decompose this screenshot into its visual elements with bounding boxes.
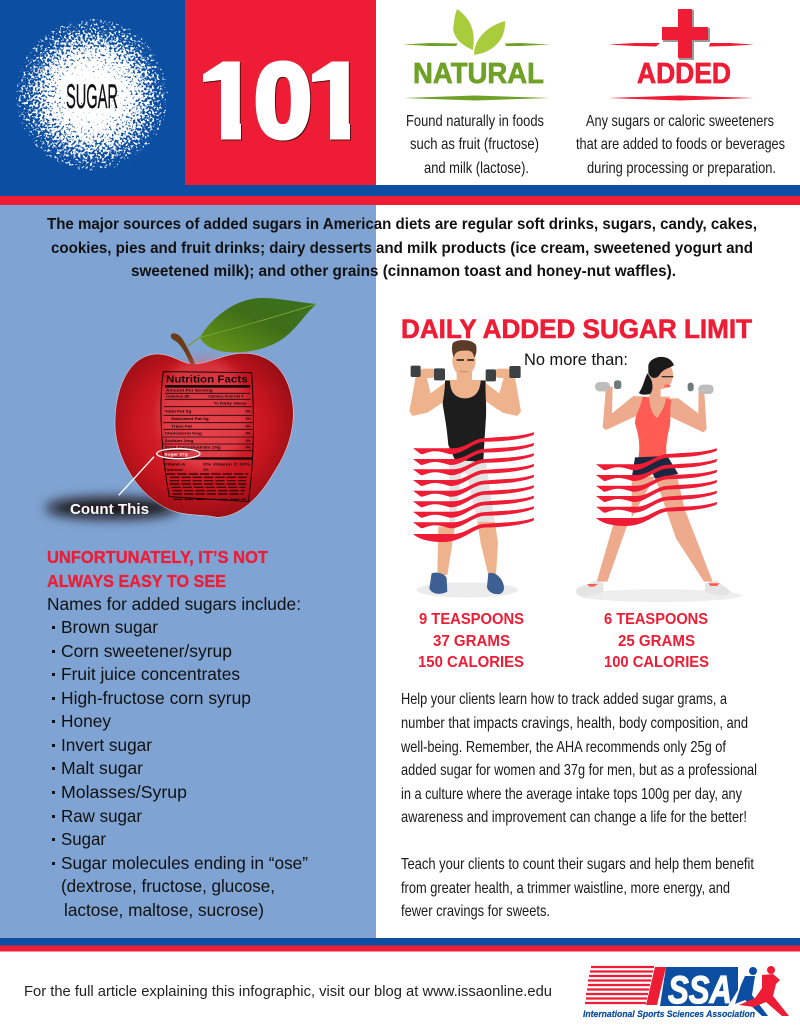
apple shadow [46, 498, 178, 518]
nutrition label: % Daily Value [214, 402, 247, 406]
panel: 101 [185, 0, 376, 185]
callout line [119, 457, 154, 495]
list: names for added sugars: Sugar molecules ending in “ose” [61, 853, 308, 873]
logo runners [735, 966, 789, 1016]
list: names for added sugars: Brown sugar [61, 617, 158, 637]
stats: women limits: 6 TEASPOONS [604, 611, 708, 628]
logo I [646, 967, 666, 1005]
text: natural description: Found naturally in foods [406, 113, 544, 130]
nutrition label: 0% [246, 424, 252, 428]
heading: not always easy to see [47, 547, 268, 591]
nutrition label: 0% [246, 439, 252, 443]
nutrition label: Total Carbohydrate 20g [165, 445, 221, 450]
nutrition label: 0% Vitamin C 10% [203, 462, 251, 466]
text: natural description: such as fruit (fructose) [410, 136, 539, 153]
nutrition label: Saturated Fat 0g [171, 416, 209, 421]
list: names for added sugars: Honey [61, 711, 111, 731]
top band [0, 185, 800, 205]
illustration: woman with dumbbells [576, 357, 742, 602]
nutrition label: Calories from Fat 4 [208, 395, 244, 399]
stats: women limits: 25 GRAMS [618, 633, 695, 650]
nutrition label: 6% [246, 446, 252, 450]
apple stem [171, 333, 195, 365]
text: added description [576, 113, 785, 177]
stats: men limits: 9 TEASPOONS [419, 611, 524, 628]
nutrition label: Sodium 2mg [165, 438, 194, 443]
nutrition label: Trans Fat [171, 423, 193, 428]
nutrition label: Vitamin A [165, 462, 186, 466]
callout label: Count This [70, 501, 149, 518]
bottom band [0, 938, 800, 952]
list: names for added sugars: Fruit juice concentrates [61, 664, 240, 684]
list: names for added sugars: Molasses/Syrup [61, 782, 187, 802]
sugar highlight ring: Sugar 37g [164, 451, 188, 456]
text: natural description: and milk (lactose). [424, 160, 529, 177]
nutrition label: Cholesterol 0mg [165, 431, 203, 436]
apple leaf [188, 298, 317, 352]
heading: 101 [203, 60, 351, 142]
logo tagline: International Sports Sciences Association [583, 1009, 755, 1020]
apple body [115, 353, 293, 517]
icon: sugar pile [16, 19, 168, 171]
highlights [158, 357, 248, 470]
sugar highlight ring [157, 449, 200, 459]
text: advice paragraphs: well-being. Remember, the AHA recommends only 25g of [400, 739, 726, 756]
text: advice paragraphs: from greater health, a trimmer waistline, more energy, and [401, 880, 730, 897]
text: major sources intro: The major sources of added sugars in American diets are regular soft drinks, sugars, candy, cakes, [47, 216, 757, 233]
panel: sugar header [0, 0, 185, 196]
icon: man spoons [413, 432, 534, 542]
icon: plus [608, 9, 754, 60]
heading: 101: 1 [198, 42, 257, 160]
panel: natural [403, 9, 550, 177]
stats: men limits: 150 CALORIES [418, 654, 524, 671]
text: advice paragraphs [400, 691, 757, 920]
list: names for added sugars: Names for added sugars include: [47, 594, 301, 614]
illustration: man with dumbbells [409, 340, 521, 598]
text: advice paragraphs: fewer cravings for sweets. [401, 903, 550, 920]
list: names for added sugars: Sugar [61, 829, 106, 849]
panel: left column background [0, 205, 376, 938]
text: advice paragraphs: Help your clients learn how to track added sugar grams, a [401, 691, 727, 708]
list: names for added sugars: lactose, maltose, sucrose) [64, 900, 264, 920]
nutrition label: Total Fat 0g [165, 408, 192, 413]
nutrition label: 0% [246, 432, 252, 436]
heading: added: ADDED [637, 58, 731, 90]
logo: ISSA [583, 966, 789, 1020]
list: names for added sugars [47, 594, 308, 920]
nutrition label: 0% [203, 468, 209, 472]
text: major sources intro: sweetened milk); and other grains (cinnamon toast and honey-nut waffles). [131, 263, 676, 280]
stats: women limits: 100 CALORIES [604, 654, 709, 671]
nutrition label [161, 372, 253, 502]
logo block with SSA: SSA [668, 969, 732, 1012]
text: natural description [406, 113, 544, 177]
heading: not always easy to see: UNFORTUNATELY, IT’S NOT [47, 547, 268, 567]
icon: woman spoons [596, 448, 717, 526]
heading: 101: 0 [254, 42, 312, 160]
nutrition label: Calories 80 [166, 395, 189, 399]
text: major sources intro: cookies, pies and fruit drinks; dairy desserts and milk products (ice cream, sweetened yogurt and [51, 240, 753, 257]
list: names for added sugars: Corn sweetener/syrup [61, 641, 232, 661]
heading: not always easy to see: ALWAYS EASY TO SEE [47, 571, 226, 591]
list: names for added sugars: (dextrose, fructose, glucose, [61, 876, 275, 896]
logo stripes [585, 967, 654, 1003]
heading: 101: 1 [307, 42, 366, 160]
panel: added [576, 9, 785, 177]
icon: leaves [403, 9, 550, 55]
stats: women limits [604, 611, 709, 671]
panel: sugar header: SUGAR [66, 78, 118, 116]
stats: men limits: 37 GRAMS [433, 633, 510, 650]
heading: natural: NATURAL [413, 58, 544, 90]
stats: men limits [418, 611, 524, 671]
nutrition label: 0% [246, 417, 252, 421]
nutrition label: Calcium [165, 468, 184, 472]
list: names for added sugars: Raw sugar [61, 806, 142, 826]
nutrition label: 0% [246, 409, 252, 413]
nutrition label: Nutrition Facts [166, 374, 248, 385]
list: names for added sugars: Invert sugar [61, 735, 152, 755]
list: names for added sugars: Malt sugar [61, 758, 143, 778]
illustration: apple with nutrition label [46, 298, 317, 518]
heading: daily added sugar limit: DAILY ADDED SUGAR LIMIT [401, 314, 752, 344]
footer text: For the full article explaining this infographic, visit our blog at www.issaonline.edu [24, 984, 552, 1000]
list: names for added sugars: High-fructose corn syrup [61, 688, 251, 708]
nutrition label: Amount Per Serving [166, 388, 213, 392]
text: major sources intro [47, 216, 757, 280]
label: no more than: No more than: [524, 350, 628, 369]
